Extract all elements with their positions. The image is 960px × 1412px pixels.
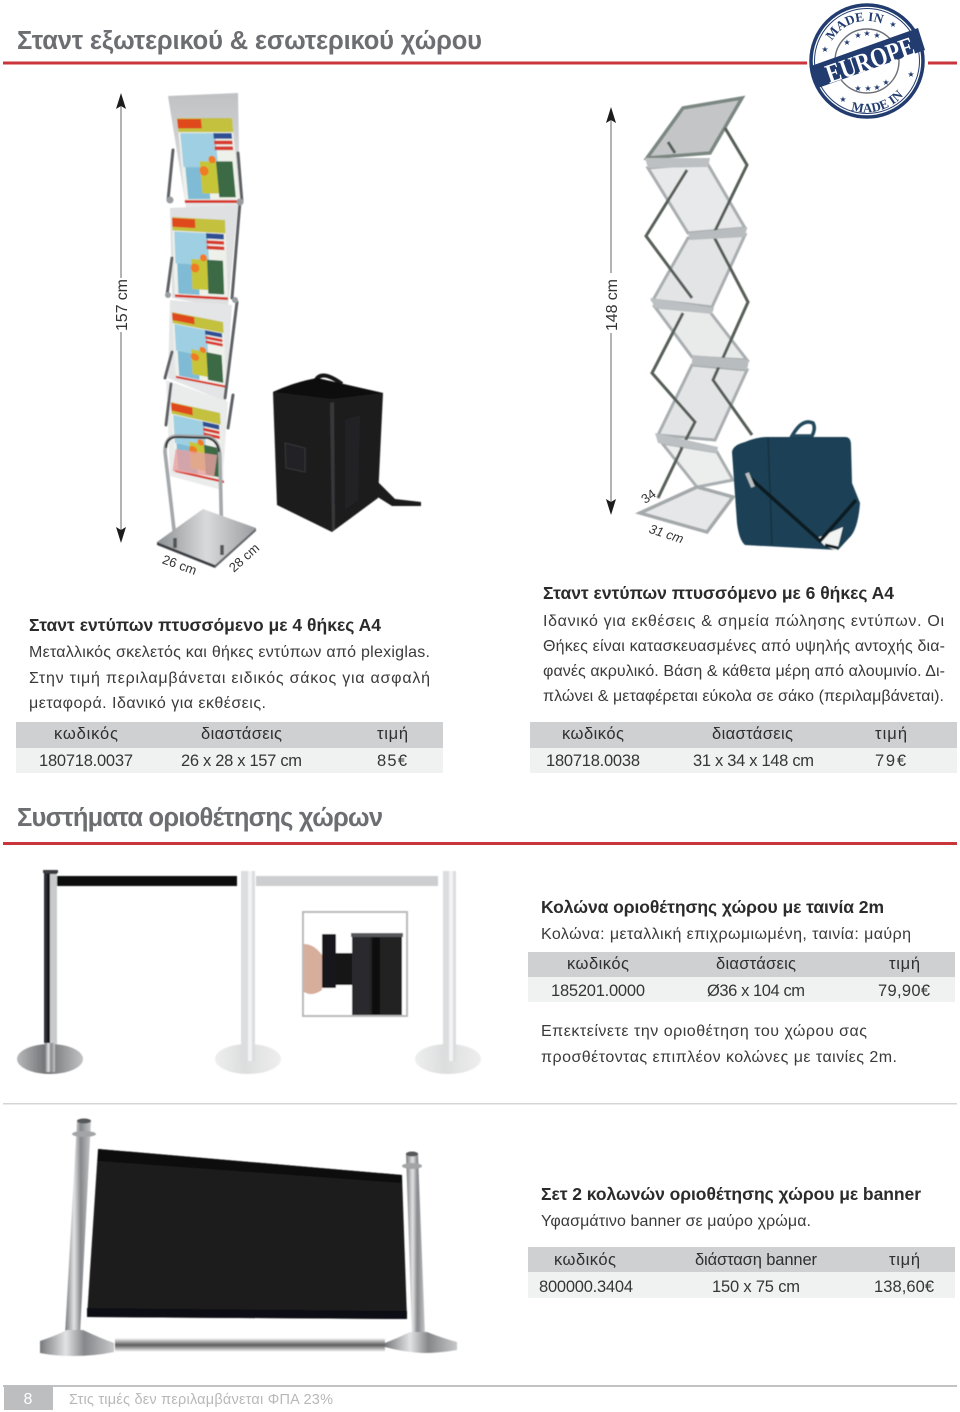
text block: banner set: Σετ 2 κολωνών οριοθέτησης χώρου με banner: [541, 1184, 921, 1204]
arrow: height 157 cm: [114, 93, 131, 543]
label: 28 cm: 28 cm: [226, 540, 262, 575]
text block: 6-pocket stand: Ιδανικό για εκθέσεις & σημεία πώλησης εντύπων. Οι: [543, 613, 944, 630]
text block: 6-pocket stand: [543, 583, 945, 705]
text block: 6-pocket stand: Σταντ εντύπων πτυσσόμενο με 6 θήκες Α4: [543, 583, 894, 603]
heading: space delimitation systems: Συστήματα οριοθέτησης χώρων: [17, 804, 383, 832]
image: folding brochure stand with 6 pockets: [640, 98, 752, 532]
text block: 4-pocket stand: [29, 615, 430, 712]
brochure 3: [172, 312, 227, 388]
table: banner set prices: τιμή: [889, 1251, 920, 1269]
table: 6-pocket stand prices: 180718.0038: [546, 752, 640, 770]
text block: banner set: Υφασμάτινο banner σε μαύρο χρώμα.: [541, 1213, 811, 1230]
icon: made in Europe stamp: ★: [839, 95, 847, 104]
table: 4-pocket stand prices: 180718.0037: [39, 752, 133, 770]
table: 6-pocket stand prices: κωδικός: [562, 725, 624, 743]
label: 34: 34: [638, 486, 659, 507]
image: belt barrier posts: [17, 870, 481, 1074]
text block: extension note: Επεκτείνετε την οριοθέτηση του χώρου σας: [541, 1023, 867, 1040]
image: black carrying bag: [273, 375, 421, 532]
icon: made in Europe stamp: ★: [821, 45, 829, 54]
text block: 4-pocket stand: μεταφορά. Ιδανικό για εκθέσεις.: [29, 695, 266, 712]
icon: made in Europe stamp: ★: [864, 84, 872, 93]
brochure 2: [172, 217, 228, 300]
title: outdoor and indoor stands: Σταντ εξωτερικού & εσωτερικού χώρου: [17, 27, 482, 55]
arrow: height 157 cm: 157 cm: [114, 279, 131, 331]
label: 26 cm: 26 cm: [160, 552, 199, 578]
icon: made in Europe stamp: ★: [882, 78, 890, 87]
icon: made in Europe stamp: MADE IN: [825, 12, 884, 41]
table: barrier post prices: 185201.0000: [551, 982, 645, 1000]
table: banner set prices: 800000.3404: [539, 1278, 633, 1296]
table: barrier post prices: Ø36 x 104 cm: [707, 982, 805, 1000]
table: 6-pocket stand prices: 79€: [875, 752, 906, 770]
table: banner set prices: κωδικός: [554, 1251, 616, 1269]
footer: page number and VAT note: Στις τιμές δεν περιλαμβάνεται ΦΠΑ 23%: [69, 1392, 333, 1408]
table: 4-pocket stand prices: τιμή: [377, 725, 408, 743]
table: 4-pocket stand prices: 85€: [377, 752, 407, 770]
table: 4-pocket stand prices: 26 x 28 x 157 cm: [181, 752, 302, 770]
text block: 4-pocket stand: Στην τιμή περιλαμβάνεται ειδικός σάκος για ασφαλή: [29, 670, 430, 687]
text block: extension note: προσθέτοντας επιπλέον κολώνες με ταινίες 2m.: [541, 1049, 897, 1066]
table: 6-pocket stand prices: 31 x 34 x 148 cm: [693, 752, 814, 770]
icon: made in Europe stamp: [807, 3, 925, 119]
table: 6-pocket stand prices: διαστάσεις: [712, 725, 793, 743]
text block: 4-pocket stand: Σταντ εντύπων πτυσσόμενο με 4 θήκες Α4: [29, 615, 381, 635]
table: barrier post prices: κωδικός: [567, 955, 629, 973]
text block: 6-pocket stand: φανές ακρυλικό. Βάση & κάθετα μέρη από αλουμινίο. Δι-: [543, 663, 945, 680]
table: 4-pocket stand prices: [16, 722, 443, 773]
icon: made in Europe stamp: EUROPE: [822, 31, 918, 89]
icon: made in Europe stamp: MADE IN: [851, 90, 903, 112]
label: 31 cm: 31 cm: [647, 521, 686, 546]
table: 6-pocket stand prices: [530, 722, 957, 773]
table: banner set prices: 138,60€: [874, 1278, 934, 1296]
text block: barrier post: Κολώνα: μεταλλική επιχρωμιωμένη, ταινία: μαύρη: [541, 926, 911, 943]
table: banner set prices: [528, 1247, 955, 1298]
icon: made in Europe stamp: ★: [889, 20, 897, 29]
table: 6-pocket stand prices: τιμή: [875, 725, 907, 743]
arrow: height 148 cm: [604, 107, 621, 515]
text block: barrier post: [541, 897, 911, 943]
icon: made in Europe stamp: ★: [854, 31, 862, 40]
text block: extension note: [541, 1023, 897, 1066]
icon: made in Europe stamp: ★: [873, 83, 881, 92]
image: brochure stand with 4 pockets: [157, 93, 256, 568]
arrow: height 148 cm: 148 cm: [604, 279, 621, 331]
icon: made in Europe stamp: ★: [854, 84, 862, 93]
text block: barrier post: Κολώνα οριοθέτησης χώρου με ταινία 2m: [541, 897, 884, 917]
table: barrier post prices: 79,90€: [878, 982, 930, 1000]
table: banner set prices: 150 x 75 cm: [712, 1278, 800, 1296]
image: teal carrying bag: [732, 422, 860, 551]
icon: made in Europe stamp: ★: [907, 70, 915, 79]
text block: 6-pocket stand: πλώνει & μεταφέρεται εύκολα σε σάκο (περιλαμβάνεται).: [543, 688, 944, 705]
footer: page number and VAT note: 8: [24, 1391, 33, 1408]
text block: banner set: [541, 1184, 921, 1230]
table: 4-pocket stand prices: διαστάσεις: [201, 725, 282, 743]
brochure 4: [171, 402, 224, 483]
footer: page number and VAT note: [3, 1385, 957, 1410]
image: banner barrier set: [40, 1118, 457, 1356]
table: barrier post prices: τιμή: [889, 955, 920, 973]
inset: belt cassette detail: [303, 912, 407, 1016]
brochure 1: [177, 118, 240, 203]
table: banner set prices: διάσταση banner: [695, 1251, 818, 1269]
table: 4-pocket stand prices: κωδικός: [54, 725, 118, 743]
icon: made in Europe stamp: ★: [843, 38, 851, 47]
text block: 4-pocket stand: Μεταλλικός σκελετός και θήκες εντύπων από plexiglas.: [29, 644, 430, 661]
icon: made in Europe stamp: ★: [873, 31, 881, 40]
table: barrier post prices: διαστάσεις: [716, 955, 796, 973]
icon: made in Europe stamp: ★: [863, 29, 871, 38]
text block: 6-pocket stand: Θήκες είναι κατασκευασμένες από υψηλής αντοχής δια-: [543, 638, 945, 655]
table: barrier post prices: [528, 952, 955, 1002]
